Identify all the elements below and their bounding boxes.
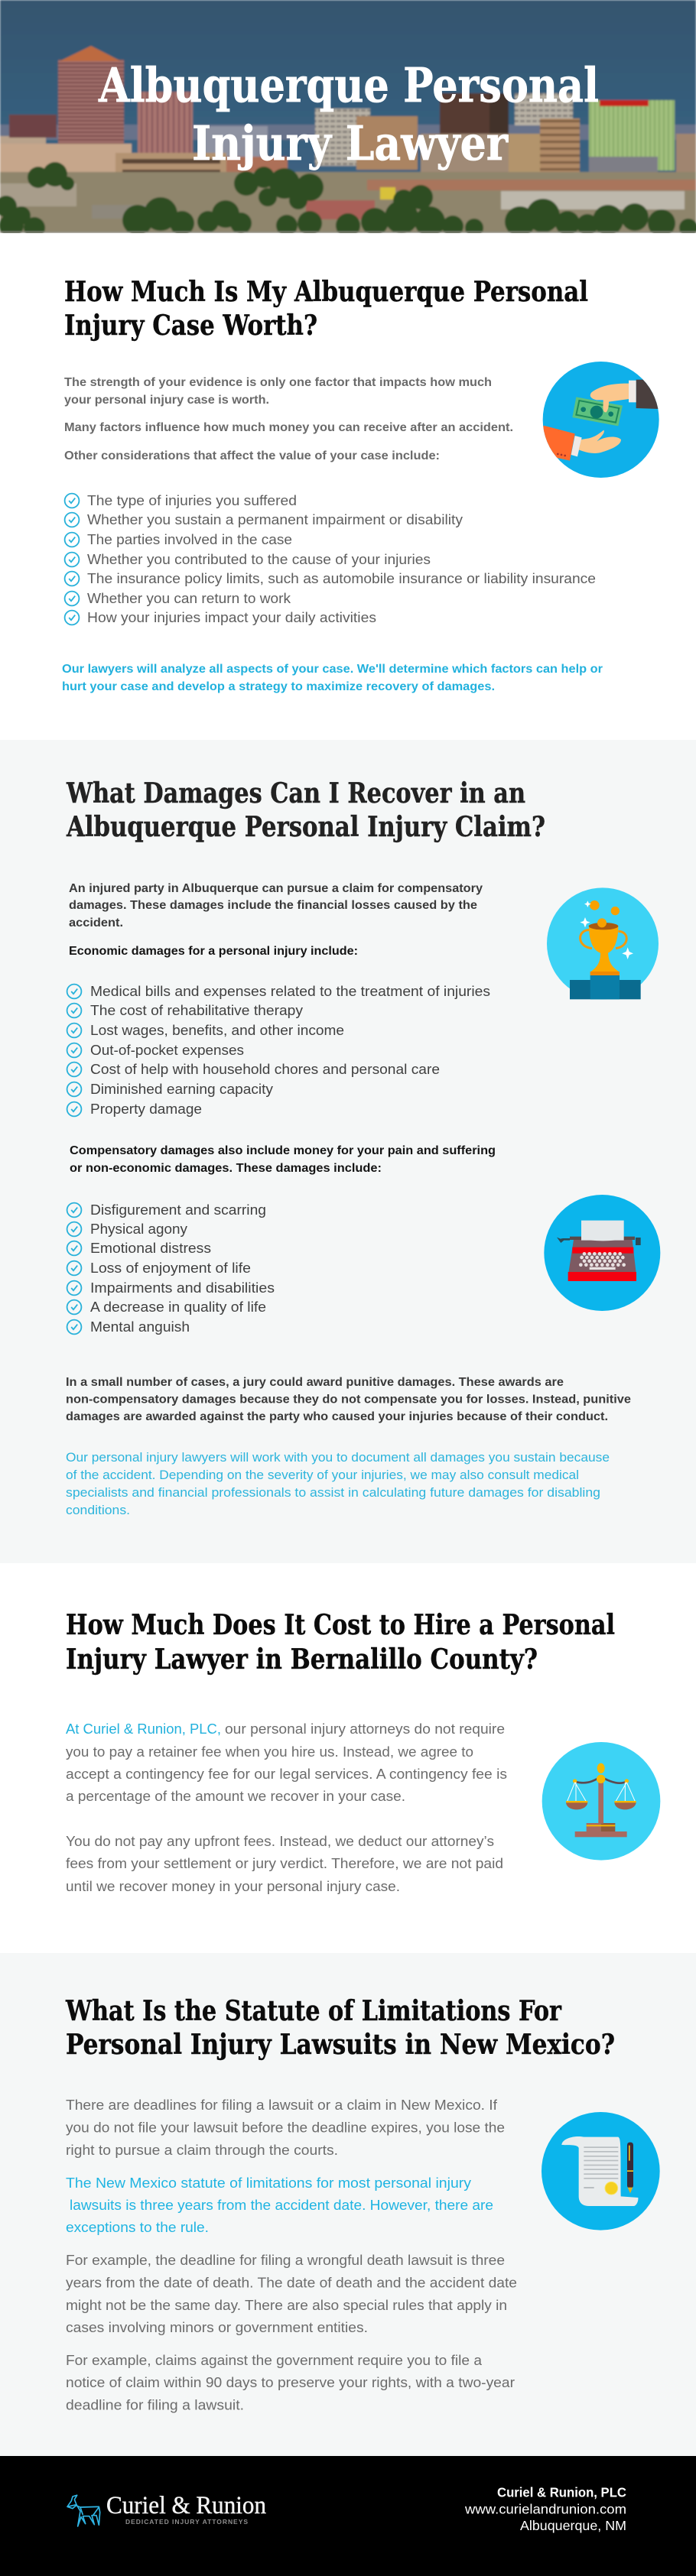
contact details: Albuquerque, NM: [520, 2518, 626, 2533]
heading: damages: Albuquerque Personal Injury Claim?: [66, 811, 545, 843]
header: skyline photo banner: [0, 0, 696, 238]
text block: deadlines: you do not file your lawsuit before the deadline expires, you lose the: [66, 2120, 505, 2136]
text block: contingency fee: [66, 1721, 507, 1804]
text block: punitive damages: damages are awarded against the party who caused your injuries because of their conduct.: [66, 1410, 608, 1423]
list item: Physical agony: [90, 1221, 187, 1237]
heading: cost: [66, 1609, 615, 1676]
checklist: economic damages: [67, 984, 490, 1117]
callout: three years: exceptions to the rule.: [66, 2220, 209, 2235]
heading: case worth: Injury Case Worth?: [64, 310, 317, 342]
heading: cost: Injury Lawyer in Bernalillo County?: [66, 1643, 538, 1676]
text block: intro: your personal injury case is worth.: [64, 394, 269, 407]
list item: The parties involved in the case: [87, 532, 292, 547]
text block: no upfront fees: You do not pay any upfront fees. Instead, we deduct our attorney’s: [66, 1834, 494, 1849]
text block: contingency fee: At Curiel & Runion, PLC,: [66, 1721, 221, 1737]
heading: damages: [66, 777, 545, 843]
list item: Emotional distress: [90, 1241, 211, 1256]
list item: Cost of help with household chores and personal care: [90, 1062, 440, 1077]
tagline: DEDICATED INJURY ATTORNEYS: [125, 2518, 248, 2526]
heading: statute: What Is the Statute of Limitations For: [65, 1995, 562, 2027]
panel: footer: [0, 2456, 696, 2576]
text block: punitive damages: In a small number of cases, a jury could award punitive damages. These awards are: [66, 1376, 564, 1389]
text block: punitive damages: non-compensatory damages because they do not compensate you for losses. Instead, punitive: [66, 1393, 631, 1406]
heading: statute: [65, 1995, 615, 2061]
list item: Out-of-pocket expenses: [90, 1043, 244, 1058]
panel: case worth: [0, 233, 696, 740]
wordmark: Curiel & Runion: [106, 2492, 266, 2519]
text block: compensatory intro: damages. These damages include the financial losses caused by the: [69, 899, 477, 912]
text block: contingency fee: accept a contingency fee for our legal services. A contingency fee is: [66, 1767, 507, 1782]
callout: document damages: Our personal injury lawyers will work with you to document all damages you sustain because: [66, 1451, 610, 1465]
icon: typewriter: [544, 1195, 660, 1311]
text block: non-economic lead-in: or non-economic damages. These damages include:: [70, 1162, 382, 1175]
list item: Loss of enjoyment of life: [90, 1260, 251, 1276]
text block: punitive damages: [66, 1376, 631, 1423]
text block: contingency fee: you to pay a retainer fee when you hire us. Instead, we agree to: [66, 1744, 473, 1760]
heading: case worth: How Much Is My Albuquerque Personal: [64, 276, 588, 308]
text block: government claims: For example, claims against the government require you to file a: [66, 2353, 483, 2368]
text block: compensatory intro: An injured party in Albuquerque can pursue a claim for compensatory: [69, 882, 483, 895]
checklist: case value factors: [65, 493, 596, 625]
text block: intro: Many factors influence how much money you can receive after an accident.: [64, 421, 513, 434]
callout: document damages: specialists and financial professionals to assist in calculating future damages for disabling: [66, 1486, 600, 1500]
list item: Mental anguish: [90, 1319, 190, 1335]
list item: Whether you sustain a permanent impairment or disability: [87, 512, 463, 527]
text block: wrongful death: cases involving minors or government entities.: [66, 2320, 368, 2335]
text block: intro: The strength of your evidence is only one factor that impacts how much: [64, 376, 492, 389]
list item: Medical bills and expenses related to the treatment of injuries: [90, 984, 490, 999]
callout: document damages: [66, 1451, 610, 1517]
callout: lawyers analyze: hurt your case and develop a strategy to maximize recovery of damages.: [62, 680, 495, 693]
text block: contingency fee: our personal injury attorneys do not require: [225, 1721, 505, 1737]
text block: no upfront fees: fees from your settlement or jury verdict. Therefore, we are not paid: [66, 1856, 503, 1871]
contact details: [464, 2484, 626, 2533]
text block: deadlines: right to pursue a claim through the courts.: [66, 2143, 338, 2158]
heading: case worth: [64, 276, 588, 342]
icon: goat outline: [67, 2495, 100, 2526]
title: Albuquerque Personal: [98, 57, 599, 113]
title: Injury Lawyer: [192, 115, 509, 171]
list item: The insurance policy limits, such as automobile insurance or liability insurance: [87, 571, 596, 586]
list item: Disfigurement and scarring: [90, 1202, 266, 1218]
callout: lawyers analyze: [62, 663, 603, 693]
list item: Whether you can return to work: [87, 591, 291, 606]
text block: wrongful death: might not be the same day. There are also special rules that apply in: [66, 2298, 507, 2313]
callout: three years: [66, 2175, 493, 2235]
checklist: non-economic damages: [67, 1202, 275, 1335]
text block: government claims: deadline for filing a lawsuit.: [66, 2397, 244, 2412]
list item: The type of injuries you suffered: [87, 493, 297, 508]
icon: scroll and pen: [542, 2112, 660, 2230]
text block: deadlines: [66, 2097, 505, 2158]
text block: wrongful death: years from the date of death. The date of death and the accident date: [66, 2275, 517, 2290]
callout: lawyers analyze: Our lawyers will analyze all aspects of your case. We'll determine which factors can help or: [62, 663, 603, 676]
callout: document damages: conditions.: [66, 1504, 130, 1517]
text block: government claims: notice of claim within 90 days to preserve your rights, with a two-year: [66, 2375, 515, 2390]
list item: How your injuries impact your daily activities: [87, 610, 376, 625]
panel: cost: [0, 1563, 696, 1953]
panel: statute of limitations: [0, 1953, 696, 2456]
text block: wrongful death: For example, the deadline for filing a wrongful death lawsuit is three: [66, 2253, 505, 2268]
icon: trophy: [547, 887, 659, 999]
text block: contingency fee: a percentage of the amount we recover in your case.: [66, 1789, 405, 1804]
contact details: www.curielandrunion.com: [464, 2501, 626, 2516]
icon: scales of justice: [542, 1742, 660, 1861]
list item: The cost of rehabilitative therapy: [90, 1003, 303, 1018]
list item: Whether you contributed to the cause of your injuries: [87, 552, 431, 567]
text block: no upfront fees: until we recover money in your personal injury case.: [66, 1879, 400, 1894]
heading: statute: Personal Injury Lawsuits in New Mexico?: [66, 2029, 615, 2061]
text block: no upfront fees: [66, 1834, 503, 1894]
callout: document damages: of the accident. Depending on the severity of your injuries, we may also consult medical: [66, 1468, 579, 1482]
callout: three years: The New Mexico statute of limitations for most personal injury: [66, 2175, 471, 2191]
list item: A decrease in quality of life: [90, 1299, 266, 1315]
logo: Curiel & Runion: [67, 2492, 266, 2526]
icon: hands exchanging money: [538, 362, 660, 478]
text block: non-economic lead-in: Compensatory damages also include money for your pain and suffering: [70, 1144, 496, 1157]
list item: Diminished earning capacity: [90, 1082, 273, 1097]
text block: intro: Other considerations that affect the value of your case include:: [64, 449, 440, 462]
text block: wrongful death: [66, 2253, 517, 2335]
heading: damages: What Damages Can I Recover in an: [66, 777, 525, 809]
list item: Lost wages, benefits, and other income: [90, 1023, 344, 1038]
text block: intro: [64, 376, 513, 462]
text block: government claims: [66, 2353, 515, 2412]
title: [98, 57, 599, 171]
text block: economic damages lead-in: Economic damages for a personal injury include:: [69, 945, 358, 958]
text block: compensatory intro: [69, 882, 483, 930]
text block: compensatory intro: accident.: [69, 917, 123, 930]
text block: non-economic lead-in: [70, 1144, 496, 1175]
text block: deadlines: There are deadlines for filing a lawsuit or a claim in New Mexico. If: [66, 2097, 498, 2113]
contact details: Curiel & Runion, PLC: [497, 2484, 626, 2500]
callout: three years: lawsuits is three years from the accident date. However, there are: [70, 2198, 493, 2213]
list item: Impairments and disabilities: [90, 1280, 275, 1296]
panel: damages: [0, 740, 696, 1563]
list item: Property damage: [90, 1101, 202, 1117]
